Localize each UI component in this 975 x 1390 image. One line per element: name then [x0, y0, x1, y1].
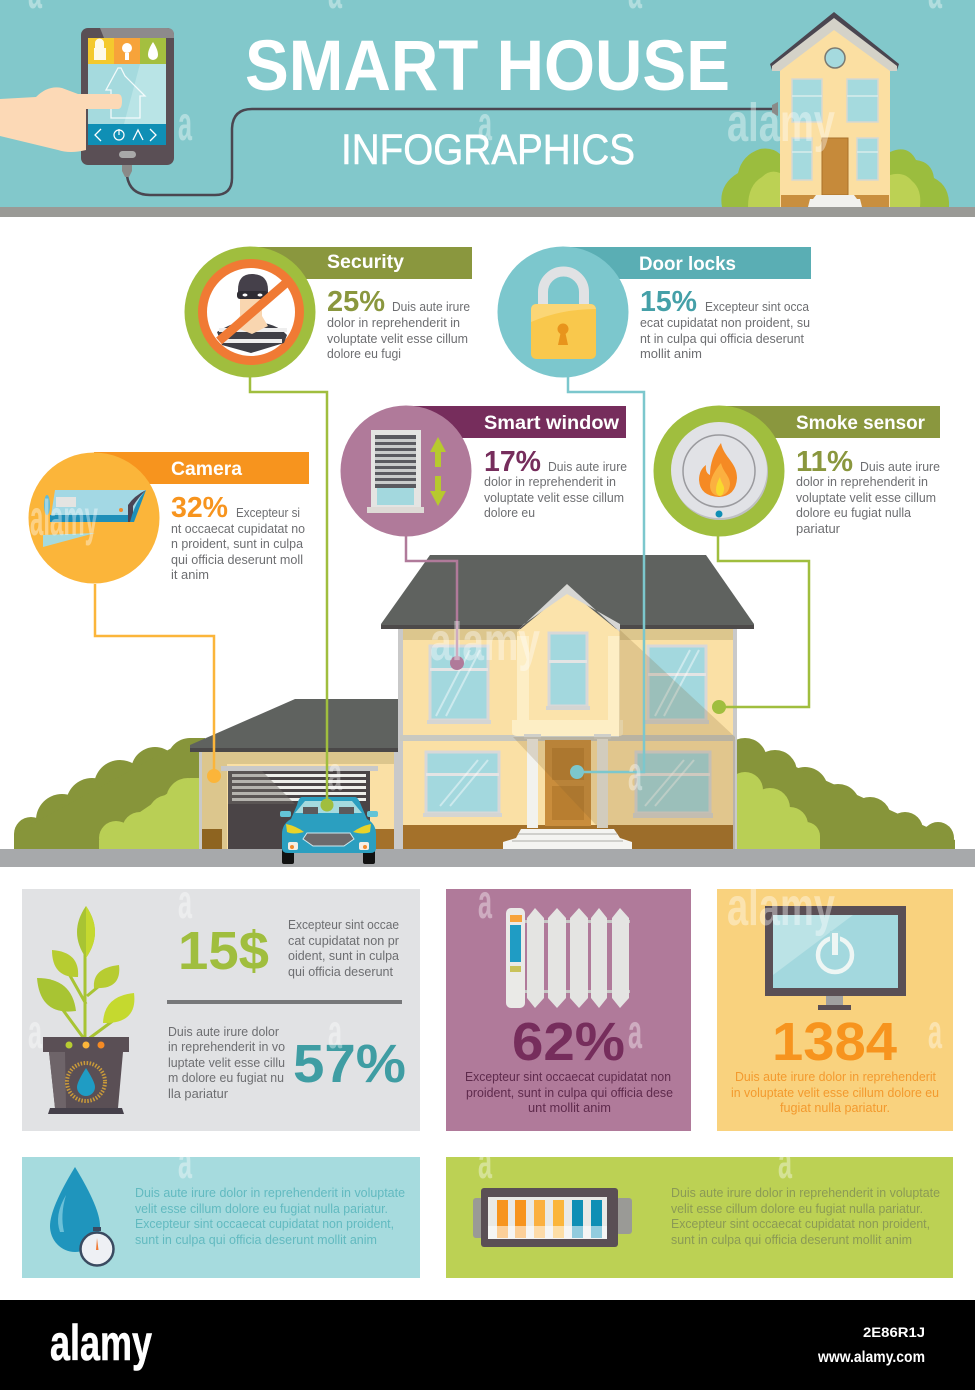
stat: 1384: 1384 [772, 1012, 897, 1072]
text block [135, 1186, 405, 1247]
text block: unt mollit anim [528, 1101, 611, 1115]
text block: dolore eu [484, 506, 535, 520]
watermark: alamy [727, 93, 835, 153]
text block: lla pariatur [168, 1087, 228, 1101]
stat: 15$: 15$ [178, 921, 269, 981]
text block: qui officia deserunt moll [171, 553, 303, 567]
text block: n proident, sunt in culpa [171, 537, 303, 551]
text block: qui officia deserunt [288, 965, 394, 979]
heading: Security [327, 252, 404, 273]
text block: ecat cupidatat non proident, su [640, 316, 810, 330]
image id: 2E86R1J [863, 1325, 925, 1340]
text block: voluptate velit esse cillum [796, 491, 936, 505]
text block: mollit anim [640, 347, 702, 361]
panel: smoke sensor [654, 406, 940, 536]
text block: Excepteur sint occae [288, 918, 399, 932]
watermarks: a [328, 748, 342, 801]
header banner [0, 0, 975, 217]
icon: smart plant pot [37, 906, 134, 1114]
road [0, 849, 975, 867]
text block: proident, sunt in culpa qui officia dese [466, 1086, 673, 1100]
panel: monitor [717, 889, 953, 1131]
icon: no burglar [202, 264, 300, 360]
watermarks: a [178, 1136, 192, 1189]
text block: in reprehenderit in vo [168, 1040, 285, 1054]
text block: velit esse cillum dolore eu fugiat nulla pariatur. [671, 1202, 923, 1216]
icon: water drop with stopwatch [50, 1167, 114, 1266]
panel: radiator [446, 889, 691, 1131]
text block: dolor in reprehenderit in [327, 316, 460, 330]
shadow [513, 629, 735, 849]
title: SMART HOUSE [245, 27, 730, 106]
connector: smart window [406, 536, 464, 670]
icon: security camera [43, 490, 146, 547]
text block: Duis aute irure dolor in reprehenderit in voluptate [135, 1186, 405, 1200]
text block: dolor in reprehenderit in [796, 475, 928, 489]
text block: voluptate velit esse cillum [484, 491, 624, 505]
logo: alamy [50, 1315, 152, 1371]
text block [171, 492, 305, 582]
stat: 62%: 62% [512, 1012, 625, 1072]
connector: camera [95, 584, 221, 783]
watermarks: a [28, 1006, 42, 1059]
text block [288, 918, 399, 979]
watermarks: a [628, 748, 642, 801]
text block: 25% [327, 286, 385, 318]
main house body [381, 555, 754, 849]
panel: camera [28, 452, 309, 584]
connector: door locks [568, 376, 644, 779]
text block: oident, sunt in culpa [288, 949, 399, 963]
text block: 17% [484, 446, 541, 478]
text block: nt in culpa qui officia deserunt [640, 332, 805, 346]
text block: 15% [640, 286, 697, 318]
text block: velit esse cillum dolore eu fugiat nulla pariatur. [135, 1202, 388, 1216]
text block: dolore eu fugiat nulla [796, 506, 911, 520]
text block: luptate velit esse cillu [168, 1056, 285, 1070]
text block: 32% [171, 492, 228, 524]
heading: Smoke sensor [796, 413, 926, 434]
entrance steps [503, 829, 632, 849]
text block: voluptate velit esse cillum [327, 332, 468, 346]
connector: smoke sensor [712, 536, 809, 714]
icon: radiator [506, 908, 630, 1008]
panel: security [184, 246, 472, 378]
icon: cable plugs [122, 102, 778, 177]
text block: in voluptate velit esse cillum dolore eu [731, 1086, 939, 1100]
garage [190, 699, 400, 849]
watermarks: a [328, 1006, 342, 1059]
panel: water [22, 1157, 420, 1278]
panel: door locks [498, 246, 811, 378]
connector: security [250, 376, 334, 812]
heading: Camera [171, 459, 242, 480]
icon: smoke detector [671, 422, 768, 520]
text block: it anim [171, 568, 209, 582]
text block: dolore eu fugi [327, 347, 401, 361]
text block: Excepteur sint occaecat cupidatat non proident, [671, 1217, 930, 1231]
text block [327, 286, 470, 361]
text block [731, 1070, 939, 1115]
windows [423, 633, 713, 818]
text block: Duis aute irure dolor in reprehenderit in voluptate [671, 1186, 940, 1200]
watermarks: alamy [430, 612, 540, 672]
watermarks: a [478, 98, 492, 151]
subtitle: INFOGRAPHICS [341, 126, 635, 174]
panel: smart window [340, 406, 627, 536]
text block: cat cupidatat non pr [288, 934, 399, 948]
text block: m dolore eu fugiat nu [168, 1071, 284, 1085]
text block: Duis aute irure dolor in reprehenderit [735, 1070, 937, 1084]
text block: Duis aute irure [860, 460, 940, 474]
door and columns [524, 734, 611, 828]
icon: padlock [531, 272, 596, 359]
text block: sunt in culpa qui officia deserunt mollit anim [135, 1233, 377, 1247]
text block: Excepteur sint occa [705, 300, 809, 314]
watermarks: a [778, 1136, 792, 1189]
watermarks: alamy [30, 490, 98, 546]
icon: monitor [765, 906, 906, 1010]
watermarks: a [628, 1006, 642, 1059]
watermarks: a [178, 876, 192, 929]
text block: Excepteur si [236, 506, 300, 520]
watermarks: a [178, 98, 192, 151]
watermarks: a [928, 1006, 942, 1059]
watermarks: a [478, 1136, 492, 1189]
text block [168, 1025, 285, 1101]
heading: Door locks [639, 254, 736, 275]
text block [484, 446, 627, 520]
bushes left [14, 738, 213, 855]
text block: fugiat nulla pariatur. [780, 1101, 890, 1115]
panel: plant savings [22, 889, 420, 1131]
text block: dolor in reprehenderit in [484, 475, 616, 489]
text block: Duis aute irure [392, 300, 470, 314]
text block [465, 1070, 673, 1115]
text block [671, 1186, 940, 1247]
watermarks: alamy [727, 877, 835, 937]
text block: Duis aute irure [548, 460, 627, 474]
icon: car [280, 797, 378, 864]
bushes right [723, 738, 955, 854]
text block: Excepteur sint occaecat cupidatat non [465, 1070, 671, 1084]
text block: 11% [796, 446, 853, 478]
text block: pariatur [796, 522, 840, 536]
watermarks: a [478, 876, 492, 929]
text block [796, 446, 940, 536]
text block [640, 286, 810, 361]
icon: tablet [81, 0, 174, 165]
icon: window with blinds [367, 430, 446, 513]
text block: Duis aute irure dolor [168, 1025, 279, 1039]
text block: nt occaecat cupidatat no [171, 522, 305, 536]
text block: Excepteur sint occaecat cupidatat non proident, [135, 1217, 394, 1231]
cable [127, 109, 772, 195]
panel: battery [446, 1157, 953, 1278]
url: www.alamy.com [817, 1349, 925, 1366]
icon: battery [473, 1188, 632, 1247]
heading: Smart window [484, 413, 619, 434]
icon: hand [0, 87, 122, 152]
text block: sunt in culpa qui officia deserunt mollit anim [671, 1233, 912, 1247]
footer bar [0, 1300, 975, 1390]
stat: 57%: 57% [293, 1034, 406, 1094]
icon: small house [721, 12, 949, 207]
